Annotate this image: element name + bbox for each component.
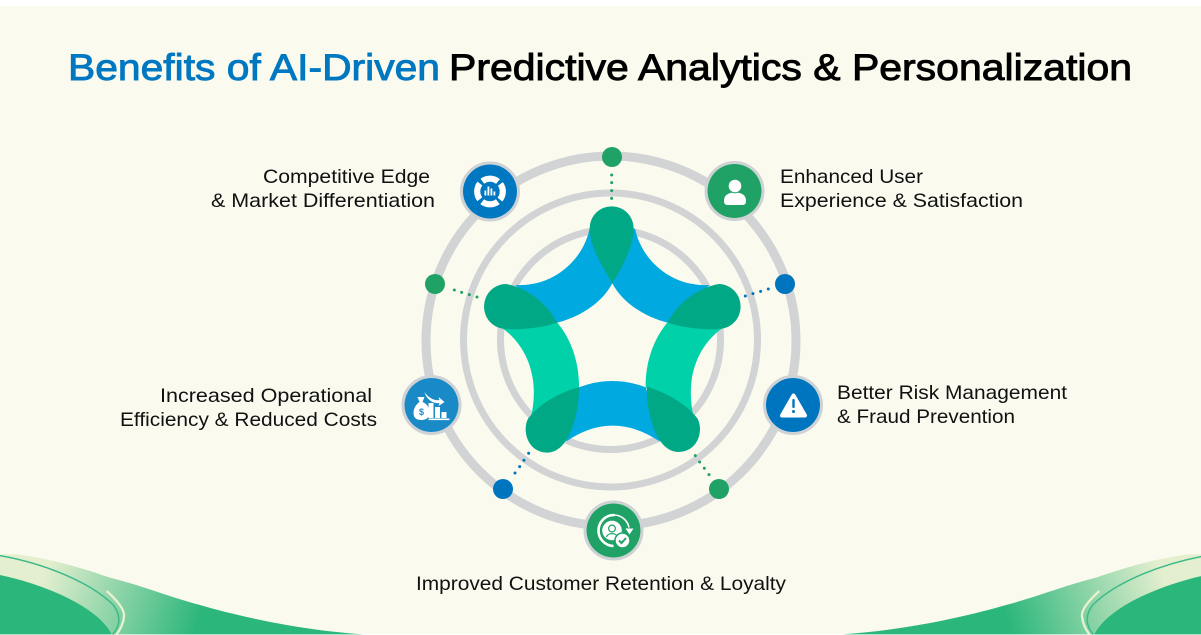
icon: competitive edge	[462, 163, 518, 220]
label: operational efficiency	[120, 386, 377, 431]
label: user experience: Enhanced User	[780, 167, 924, 188]
icon: customer retention	[585, 502, 642, 559]
ring nodes	[425, 147, 795, 499]
label: risk management	[837, 383, 1068, 428]
label: user experience	[780, 167, 1023, 212]
label: user experience: Experience & Satisfaction	[780, 191, 1023, 212]
label: customer retention: Improved Customer Retention & Loyalty	[416, 574, 786, 595]
central star	[484, 206, 741, 453]
title: Benefits of AI-Driven	[68, 47, 440, 88]
label: risk management: Better Risk Management	[837, 383, 1068, 404]
label: competitive edge: Competitive Edge	[263, 167, 430, 188]
left wave	[0, 554, 363, 634]
concentric rings	[426, 156, 796, 526]
title: Predictive Analytics & Personalization	[449, 47, 1132, 88]
label: risk management: & Fraud Prevention	[837, 407, 1015, 428]
icon: operational costs	[403, 376, 460, 434]
label: operational efficiency: Increased Operational	[160, 386, 372, 407]
label: competitive edge: & Market Differentiation	[211, 191, 435, 212]
icon: user experience	[706, 162, 763, 220]
connector dots	[453, 173, 770, 476]
title	[68, 47, 1132, 88]
icon: risk warning	[764, 376, 822, 434]
label: competitive edge	[211, 167, 435, 212]
right wave	[843, 554, 1201, 634]
icon: operational costs: $	[419, 407, 424, 417]
label: operational efficiency: Efficiency & Reduced Costs	[120, 410, 377, 431]
